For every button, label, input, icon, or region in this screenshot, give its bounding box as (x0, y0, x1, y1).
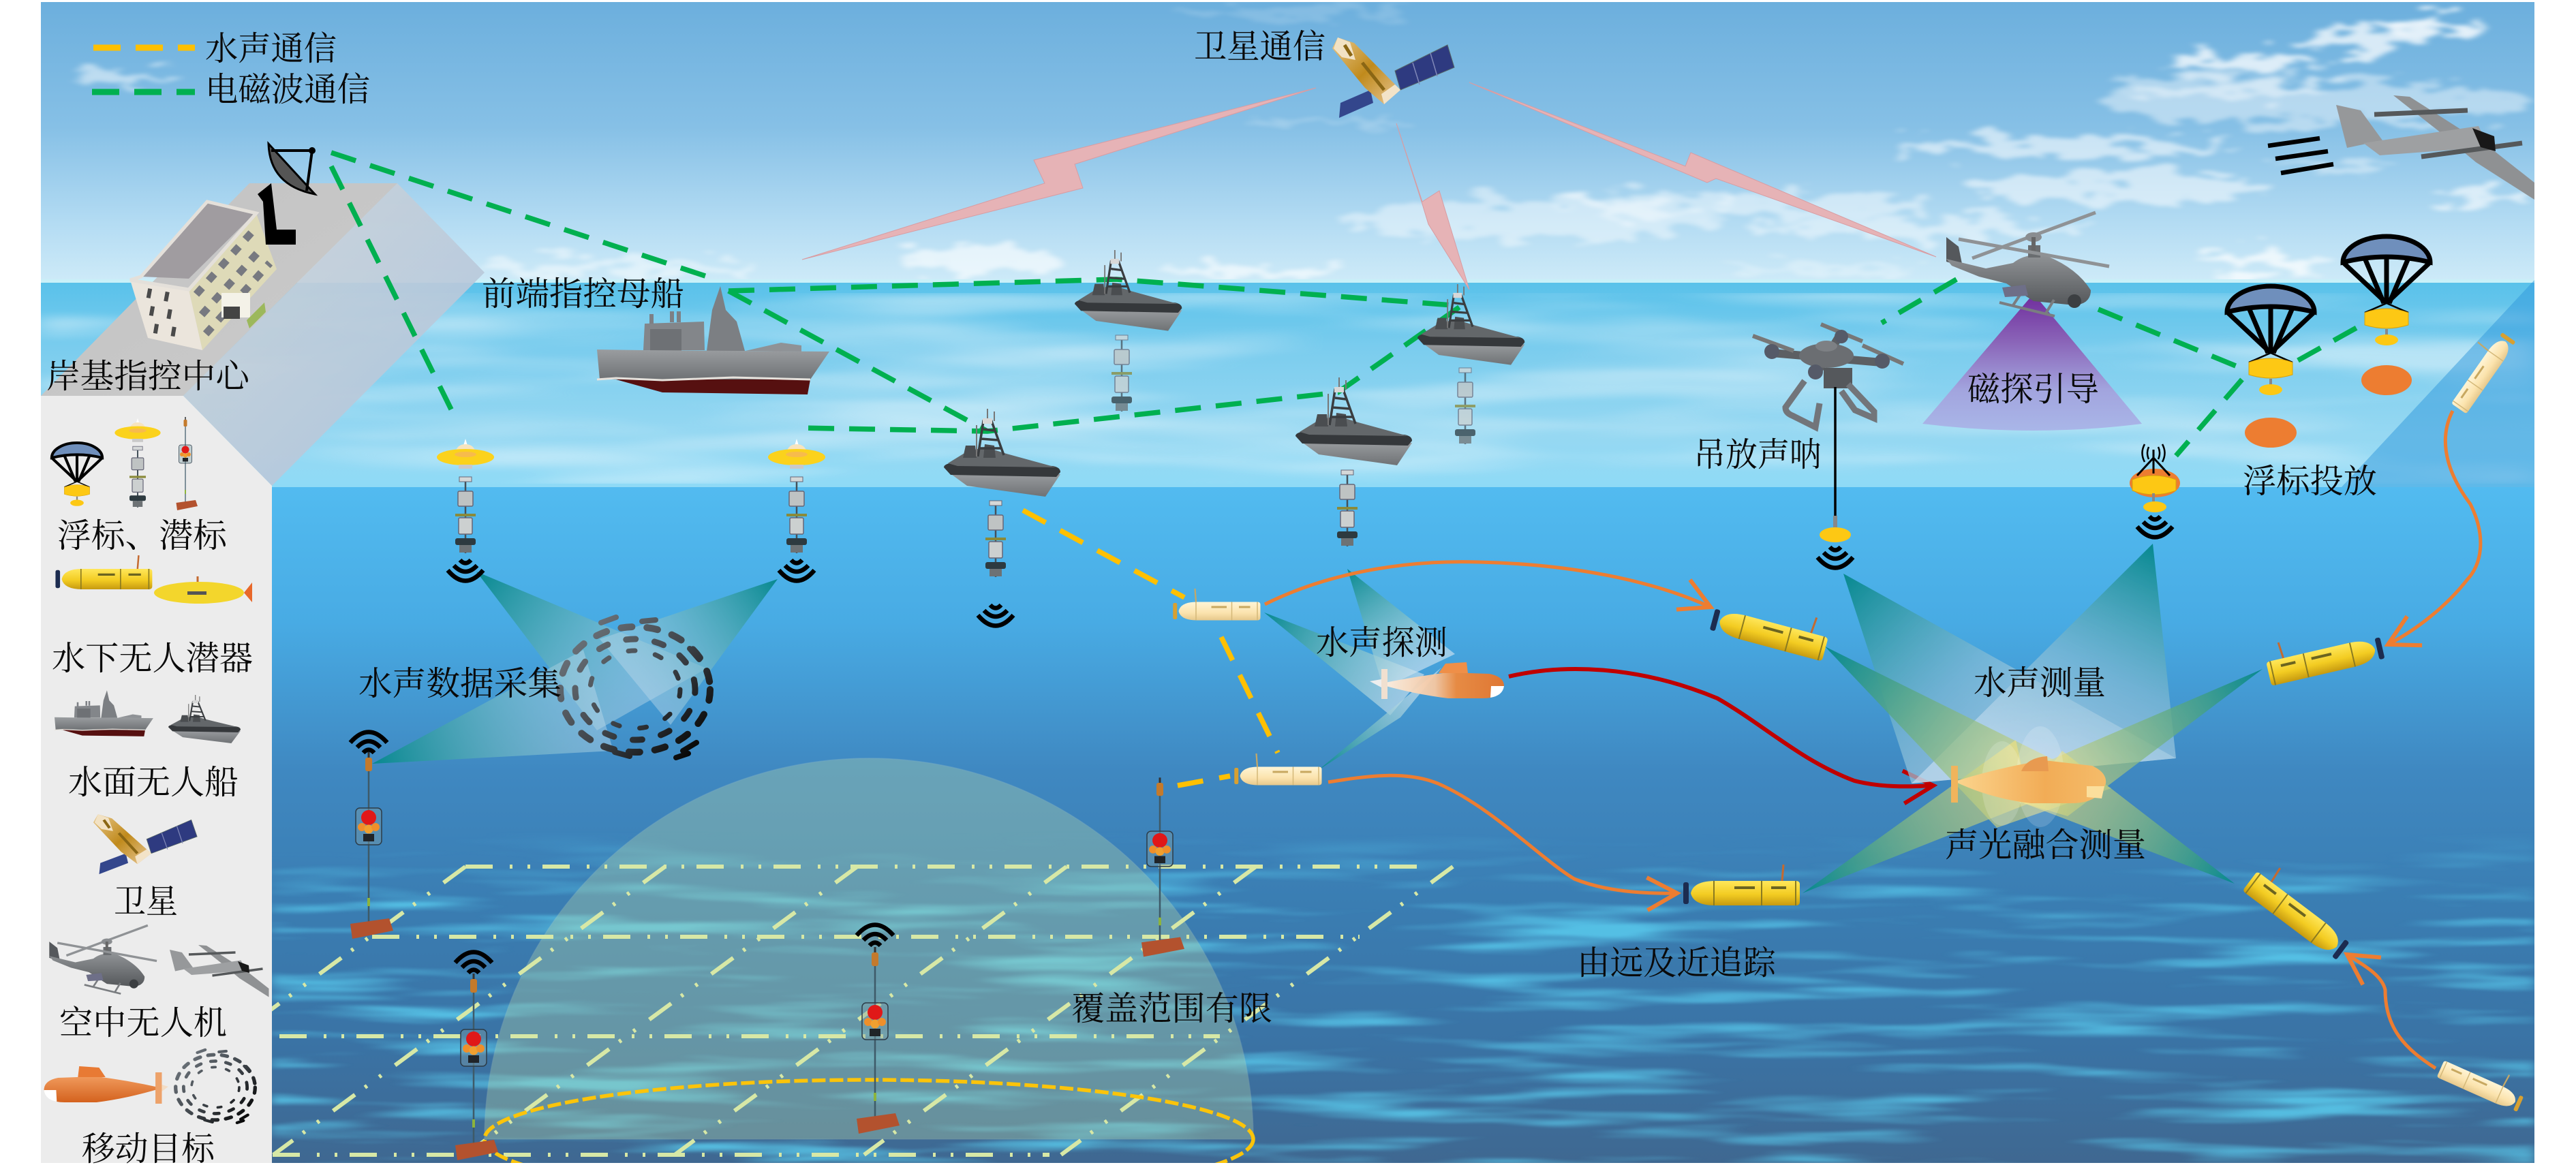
coverage ellipse (485, 1080, 1253, 1165)
moored buoys (437, 439, 825, 580)
fish school (560, 617, 710, 758)
legend icons (44, 417, 269, 1123)
label: magnetic guidance: 磁探引导 (1967, 371, 2099, 408)
icon: satellite dish (258, 144, 316, 245)
subsurface stations (350, 732, 1184, 1160)
icon: shore command building (130, 202, 277, 350)
AUVs (1173, 324, 2530, 1113)
icon: command ship (597, 286, 829, 394)
tracking arrows (1265, 411, 2481, 1068)
legend: small AUV (154, 576, 252, 604)
label: underwater vehicles: 水下无人潜器 (52, 640, 253, 677)
label: aerial drones: 空中无人机 (59, 1004, 227, 1042)
legend: parachute buoy (52, 443, 102, 506)
legend: command ship (55, 690, 153, 736)
label: buoys and subsurface buoys: 浮标、潜标 (57, 517, 228, 555)
icon: quadcopter with dipping sonar (1753, 324, 1903, 568)
shore platform: front face (183, 183, 485, 486)
legend acoustic dashed line (93, 45, 195, 50)
sky (41, 2, 2534, 280)
horizon highlight (41, 279, 2534, 283)
legend electromagnetic dashed line (92, 89, 195, 95)
label: acoustic communication: 水声通信 (205, 30, 337, 67)
label: limited coverage: 覆盖范围有限 (1071, 990, 1272, 1027)
label: dipping sonar: 吊放声呐 (1693, 436, 1822, 473)
label: satellites: 卫星 (114, 883, 178, 920)
label: acoustic data collection: 水声数据采集 (358, 665, 562, 702)
deep water ripples (272, 831, 2534, 1163)
legend: fixed-wing drone (170, 945, 269, 997)
legend: unmanned boat (168, 695, 241, 743)
underwater gradient (41, 487, 2534, 1163)
acoustic communication links (1023, 510, 1278, 786)
icon: parachute buoy B (2343, 236, 2430, 345)
legend: large AUV (55, 555, 152, 589)
label: shore command centre: 岸基指控中心 (46, 358, 251, 395)
label: buoy deployment: 浮标投放 (2243, 463, 2377, 500)
icon: fixed-wing drone (2268, 95, 2534, 200)
optical-acoustic fusion beams (1803, 647, 2263, 893)
legend: submarine (44, 1066, 168, 1104)
acoustic measurement beams (1843, 544, 2176, 783)
legend: moored buoy (114, 418, 161, 508)
satellite link bolts (802, 82, 1936, 290)
label: electromagnetic communication: 电磁波通信 (205, 71, 370, 108)
label: acoustic detection: 水声探测 (1316, 624, 1447, 662)
label: optical-acoustic fusion measurement: 声光融合测量 (1945, 826, 2146, 864)
splash markers (2245, 365, 2412, 448)
icon: parachute buoy A (2227, 286, 2314, 395)
label: acoustic measurement: 水声测量 (1974, 664, 2106, 702)
clouds (75, 6, 2542, 277)
legend: satellite (93, 814, 197, 874)
label: satellite communication: 卫星通信 (1194, 28, 1325, 65)
sea surface band (41, 280, 2534, 487)
legend: subsurface station (176, 417, 198, 510)
acoustic detection beams (1264, 569, 1455, 770)
electromagnetic communication links (331, 153, 2358, 456)
coverage dome (485, 758, 1253, 1139)
sea surface ripples (41, 293, 2534, 484)
legend panel background (41, 396, 272, 1163)
label: far to near tracking: 由远及近追踪 (1577, 944, 1777, 982)
darker surface wedge (2342, 280, 2534, 487)
acoustic beams to fish school (372, 572, 778, 764)
fused target submarine (1951, 726, 2106, 827)
legend: helicopter (49, 925, 157, 994)
detection target submarine (1370, 662, 1504, 699)
legend: fish school (176, 1050, 255, 1123)
legend: communication lines (92, 48, 195, 92)
icon: main satellite (1332, 37, 1454, 118)
shore platform: roof (41, 183, 397, 396)
icon: helicopter with magnetic cone (1922, 213, 2142, 431)
label: surface vessels: 水面无人船 (68, 764, 239, 801)
unmanned boats with sensor chains (944, 250, 1524, 625)
seabed sensor grid (272, 865, 1454, 1157)
label: forward command ship: 前端指控母船 (482, 275, 684, 313)
icon: surface relay buoy (2130, 444, 2180, 537)
